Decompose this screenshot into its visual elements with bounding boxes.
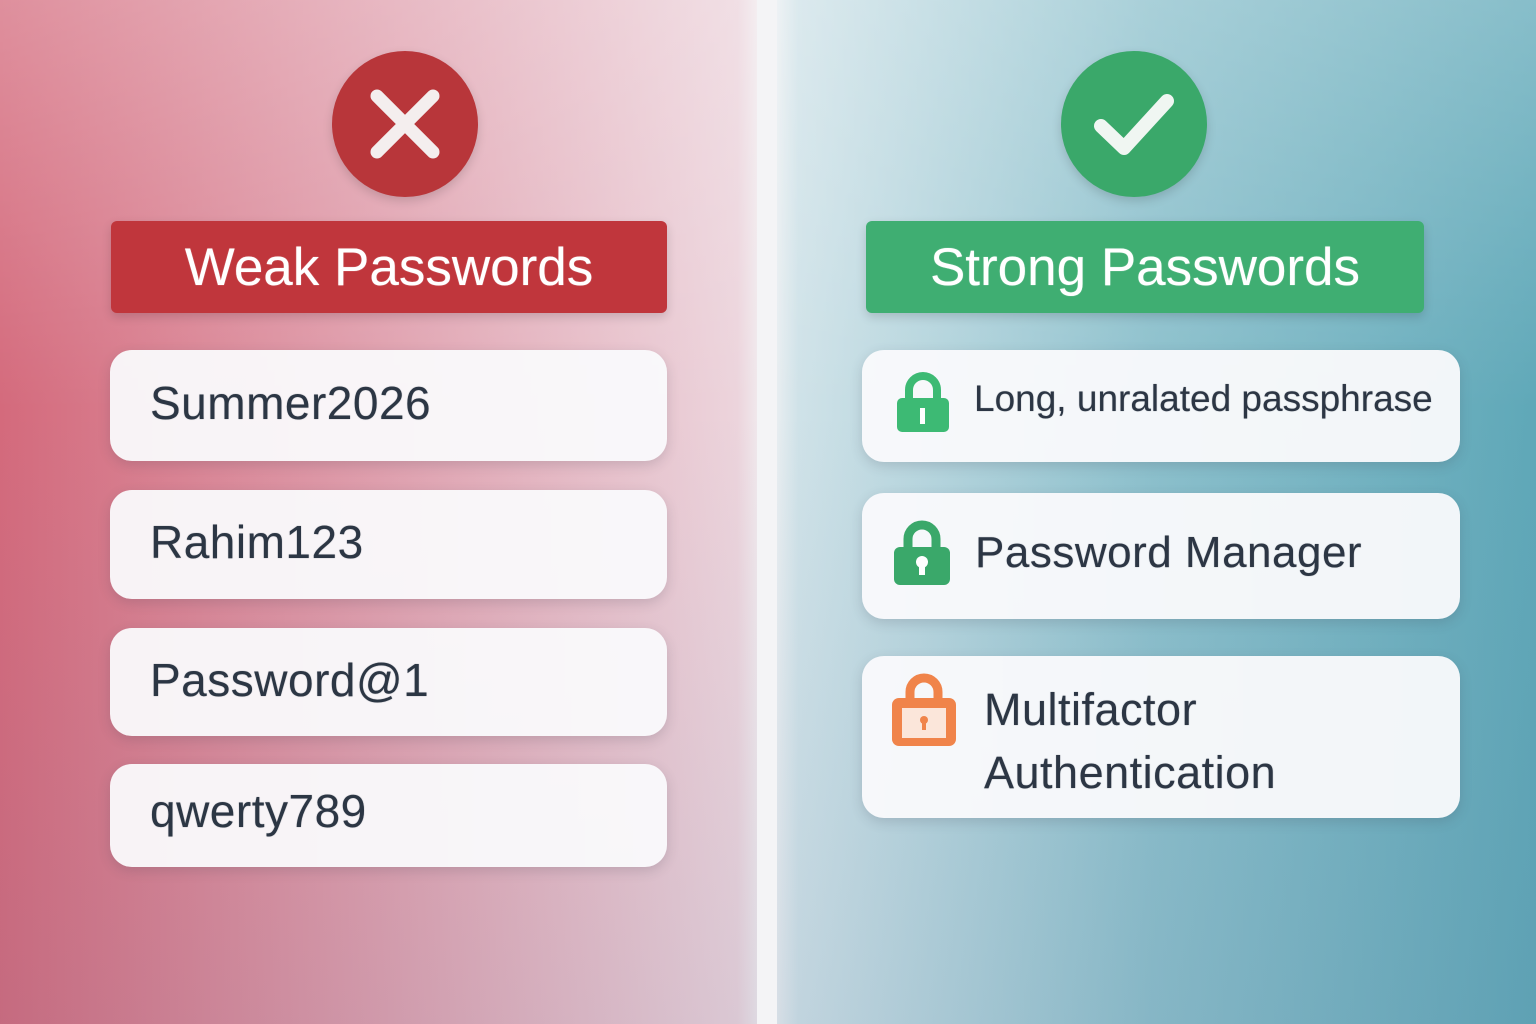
icon: green lock keyhole [894,520,950,585]
card: Password Manager: Password Manager [975,528,1362,577]
card: Rahim123: Rahim123 [150,516,364,568]
card: Password Manager [862,493,1460,619]
icon: green check circle [1061,51,1207,197]
icon: orange lock [892,674,956,746]
heading: Strong Passwords [866,221,1424,313]
card: Long passphrase: Long, unralated passphrase [974,378,1433,419]
heading: Weak Passwords [111,221,667,313]
heading: Weak Passwords: Weak Passwords [185,238,593,297]
icon: green lock [897,372,949,432]
card: qwerty789 [110,764,667,867]
card: Rahim123 [110,490,667,599]
card: Password@1: Password@1 [150,654,429,706]
heading: Strong Passwords: Strong Passwords [930,238,1360,297]
card: Multifactor Authentication [862,656,1460,818]
card: Long passphrase [862,350,1460,462]
icon: red X circle [332,51,478,197]
card: Summer2026: Summer2026 [150,377,431,429]
card: Multifactor Authentication: Multifactor [984,684,1197,735]
card: qwerty789: qwerty789 [150,785,367,837]
card: Password@1 [110,628,667,736]
card: Summer2026 [110,350,667,461]
card: Multifactor Authentication: Authentication [984,747,1276,798]
